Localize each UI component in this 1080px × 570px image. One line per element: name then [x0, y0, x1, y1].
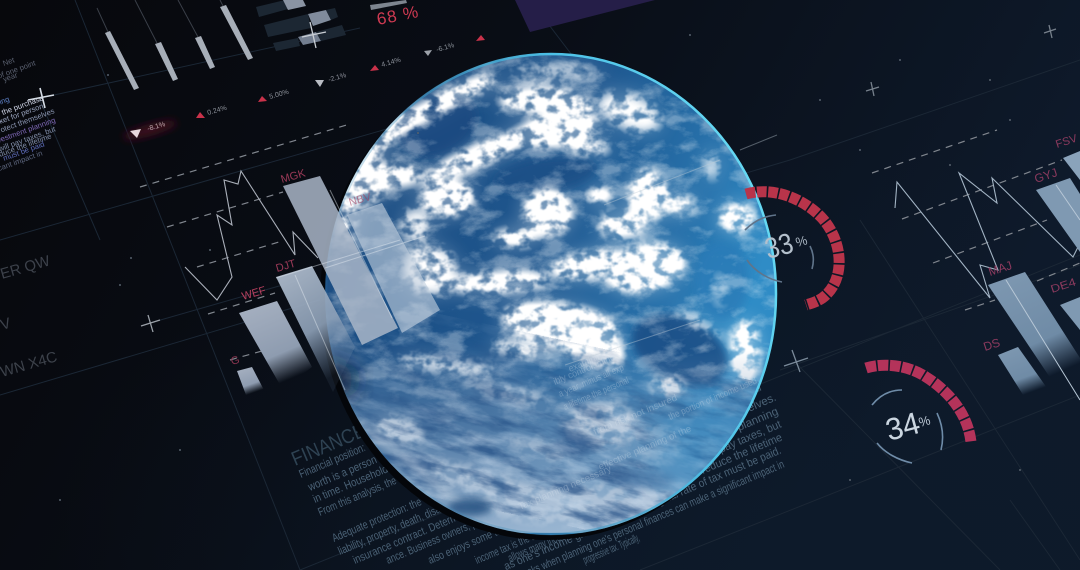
chart: horizontal progress blocks	[256, 0, 346, 51]
faded row labels: WN X4C	[0, 348, 59, 381]
text block: finance paragraphs: which can be used to reduce the lifetime	[604, 432, 784, 517]
text overlay on globe: a year, minus all exp	[557, 362, 626, 400]
line chart: left	[185, 171, 318, 300]
text block: finance paragraphs: portion of it you will pay taxes, but	[631, 418, 784, 492]
text block: finance paragraphs: protect themselves.	[682, 392, 778, 442]
bar chart: right: GYJ	[1033, 165, 1059, 186]
bar chart: left bars over globe: NBV	[348, 191, 373, 209]
gauge: 34 percent: 34	[882, 405, 924, 448]
text overlay on globe: ibly control, minus	[552, 350, 621, 388]
crosshair markers	[28, 22, 1056, 372]
bar chart: right: MAJ	[987, 258, 1014, 279]
text block: finance paragraphs: investment planning	[681, 406, 780, 457]
text overlay on globe: from risk not insured	[592, 392, 679, 438]
gauge: 34 percent: %	[917, 412, 932, 430]
gauge: 33 percent: %	[794, 232, 809, 250]
text block: finance paragraphs: Adequate protection: the	[330, 496, 424, 545]
gauge: 33 percent: 33	[762, 228, 797, 266]
faded row labels	[0, 252, 59, 381]
text block: finance paragraphs: ance. Business owners, profess	[384, 509, 500, 567]
text overlay on globe: Tax planning necessary	[517, 463, 613, 513]
bar chart: top candles	[97, 0, 253, 90]
panel: top-left paragraph: must be paid	[2, 139, 46, 163]
stat: 68 percent: 68 %	[375, 2, 421, 29]
bar chart: left bars over globe: MGK	[280, 167, 308, 186]
bar chart: left bars over globe: DJT	[275, 258, 297, 275]
text block: finance paragraphs: income tax is the single	[473, 524, 552, 567]
globe: atmosphere rim	[326, 54, 776, 534]
ticker row of percentages: -6.1%	[436, 42, 455, 54]
ticker row of percentages: -2.1%	[328, 72, 347, 84]
globe: earth with clouds	[325, 54, 775, 535]
globe: lower-left white cloud edge	[353, 409, 462, 504]
text block: finance paragraphs: also enjoys some tax bene	[426, 515, 528, 567]
ticker row of percentages: -8.1%	[147, 121, 166, 133]
bar chart: left bars over globe: WEF	[241, 285, 268, 303]
line chart: right	[895, 173, 1080, 298]
text block: finance paragraphs: allows many incentives	[506, 524, 580, 565]
text overlay on globe: the portion of income used	[667, 376, 759, 423]
text block: finance paragraphs: FINANCE AND	[288, 403, 407, 471]
text block: finance paragraphs: personal	[718, 382, 763, 410]
panel: top-left paragraph	[0, 55, 58, 173]
text block: finance paragraphs: worth is a person's	[306, 451, 385, 494]
globe shadow at lower-left limb	[320, 58, 772, 540]
text block: finance paragraphs: Financial position: com	[297, 435, 385, 481]
text block: finance paragraphs: in time. Household	[311, 463, 390, 506]
ticker row of percentages	[121, 35, 485, 143]
gauge: 33 percent	[745, 192, 839, 305]
text overlay on globe: a lifetime the personal	[562, 375, 631, 413]
ticker row of percentages: 5.00%	[269, 89, 290, 101]
text overlay on globe: effective planning of the	[597, 424, 693, 473]
panel: purple block	[515, 0, 655, 32]
faded row labels: ER QW	[0, 252, 53, 283]
panel: top-left paragraph: the purchase	[0, 93, 45, 117]
gauge: 34 percent	[866, 365, 971, 463]
bar chart: right	[982, 132, 1080, 400]
ticker row of percentages: 4.14%	[381, 57, 402, 69]
text overlay on globe	[517, 343, 759, 513]
text overlay on globe: examining net	[567, 343, 622, 375]
bar chart: right: FSV	[1054, 132, 1079, 151]
text block: finance paragraphs: liability, property, death, disa	[336, 504, 443, 558]
text block: finance paragraphs: as one's income grows, a higher marginal rate of tax must be paid.	[502, 445, 783, 570]
bar chart: left bars over globe: G	[230, 354, 241, 368]
bar chart: left bars over globe	[230, 167, 440, 395]
text block: finance paragraphs: insurance contract. Determin	[351, 509, 467, 567]
text block: finance paragraphs: progressive tax. Typically,	[581, 532, 641, 567]
panel: top-left paragraph: year	[2, 70, 19, 84]
panel: top-left paragraph: Net	[1, 55, 17, 68]
scattered dots	[59, 34, 1021, 501]
bar chart: right: DS	[982, 335, 1002, 354]
text block: finance paragraphs: From this analysis, the fin	[316, 471, 409, 519]
ticker row of percentages: 0.24%	[207, 105, 228, 117]
bar chart: right: DE4	[1049, 276, 1078, 296]
text block: finance paragraphs	[288, 382, 786, 570]
